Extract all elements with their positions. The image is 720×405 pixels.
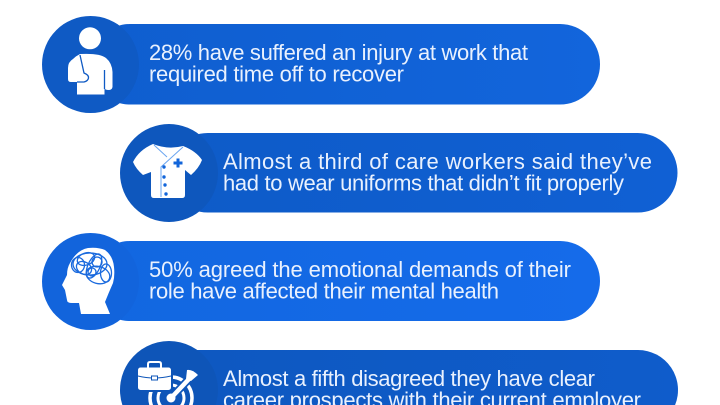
icon: uniform shirt [133, 144, 202, 198]
statistic text [223, 149, 652, 196]
panel: injury statistic [42, 16, 600, 113]
pill background [168, 350, 678, 405]
statistic text: 50% agreed the emotional demands of their [149, 257, 571, 282]
statistic text: had to wear uniforms that didn’t fit properly [223, 170, 624, 196]
icon circle [42, 233, 139, 330]
panel: mental health statistic [42, 233, 600, 330]
statistic text [149, 257, 571, 304]
panel: career prospects statistic [120, 341, 678, 405]
icon circle [120, 341, 218, 405]
statistic text [149, 40, 528, 86]
icon circle [42, 16, 139, 113]
pill background [168, 133, 678, 212]
panel: uniform statistic [120, 124, 678, 222]
icon circle [120, 124, 218, 222]
statistic text: 28% have suffered an injury at work that [149, 40, 528, 65]
icon: briefcase and target [136, 362, 198, 405]
statistic text: required time off to recover [149, 62, 404, 86]
pill background [90, 241, 600, 321]
statistic text: Almost a fifth disagreed they have clear [223, 366, 595, 391]
pill background [90, 24, 600, 104]
statistic text: role have affected their mental health [149, 278, 499, 304]
icon: person with arm sling [68, 27, 112, 94]
icon: head with tangled brain [62, 248, 114, 314]
statistic text [223, 366, 641, 405]
statistic text: Almost a third of care workers said they’ve [223, 149, 652, 174]
